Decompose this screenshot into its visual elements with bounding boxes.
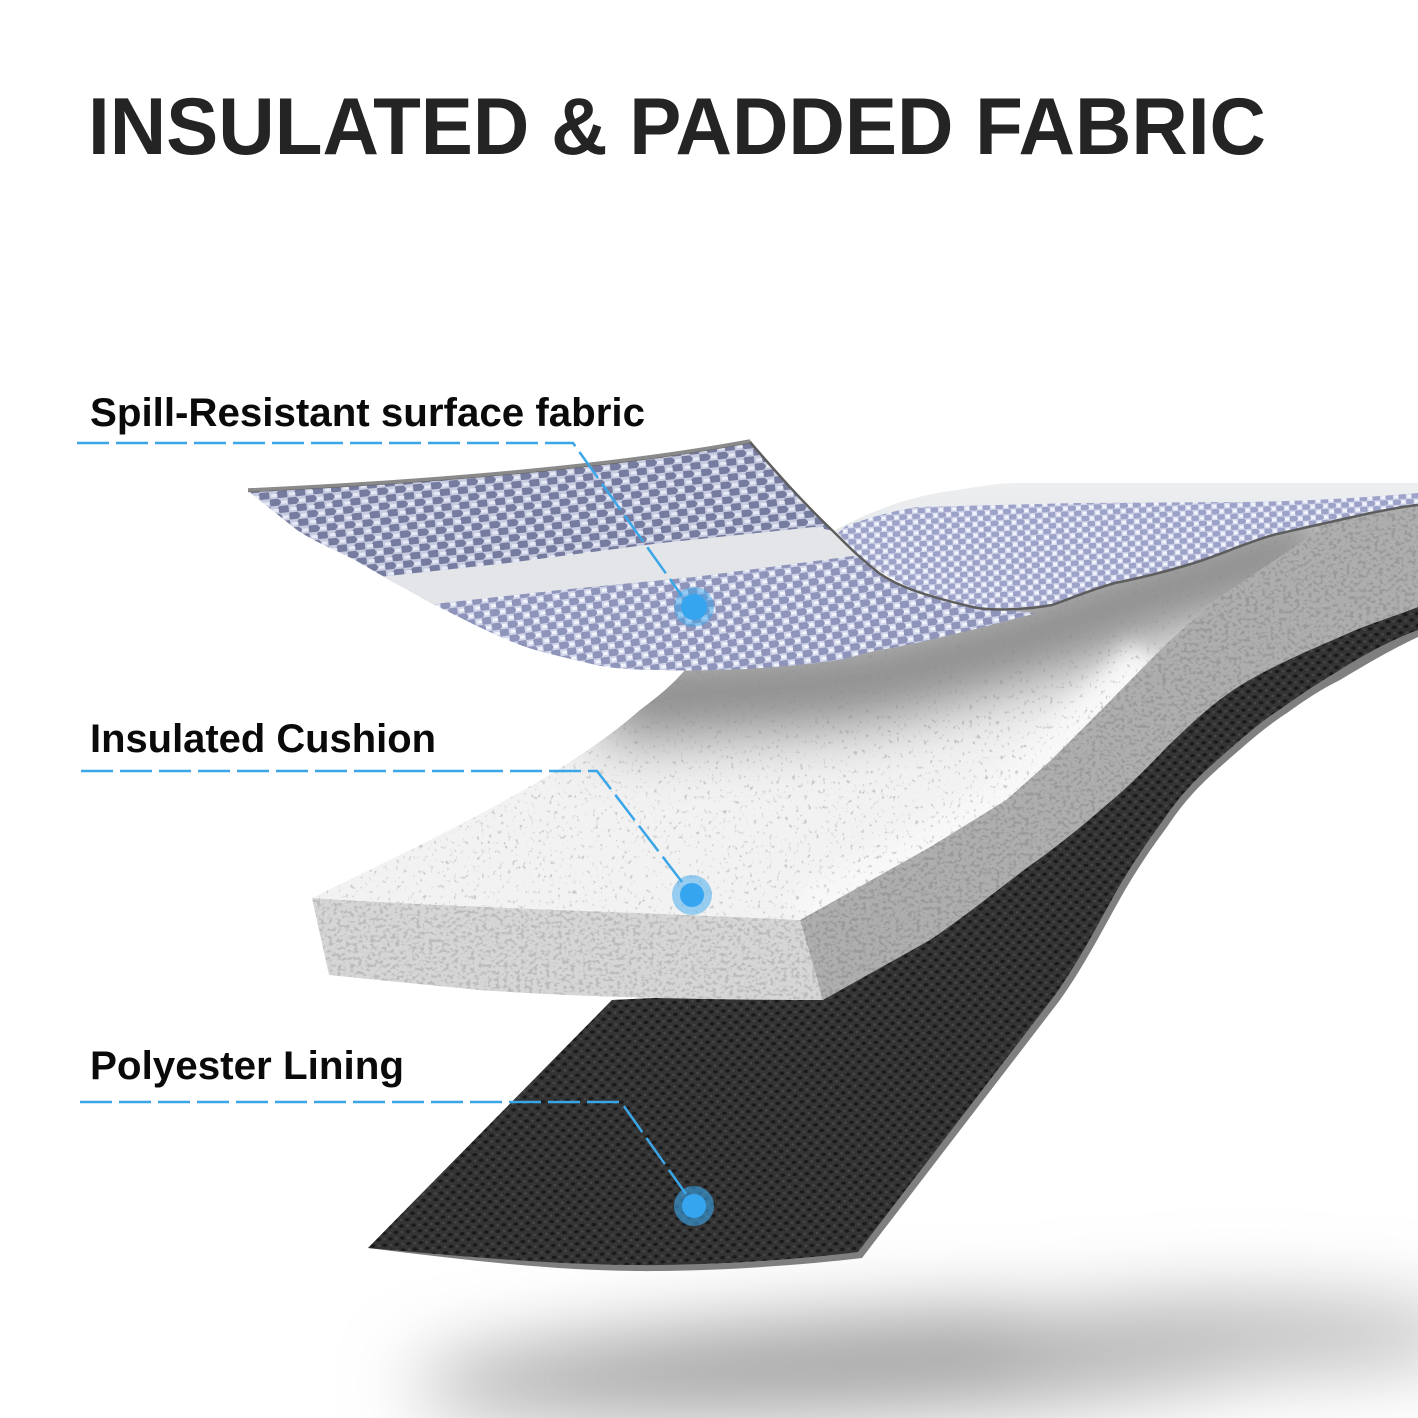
label: polyester lining [80, 1044, 714, 1226]
foam top surface [312, 526, 1320, 920]
fabric edge line [248, 442, 1418, 609]
title: INSULATED & PADDED FABRIC [88, 82, 1266, 172]
front fabric flap [250, 444, 1036, 670]
lining black weave surface [368, 590, 1418, 1265]
label text: Spill-Resistant surface fabric [90, 391, 645, 435]
lining grey edge [368, 590, 1418, 1271]
layer: insulated cushion foam [300, 490, 1418, 1000]
foam front cut face [312, 898, 823, 1000]
layer: spill-resistant surface fabric [240, 435, 1418, 680]
leader line [80, 1102, 686, 1194]
marker dot [672, 875, 712, 915]
back fabric fold [835, 483, 1418, 609]
flap dark weave band [240, 435, 1040, 675]
fabric top thickness [248, 441, 750, 490]
marker dot [674, 1186, 714, 1226]
foam side texture [800, 490, 1418, 1000]
label text: Insulated Cushion [90, 717, 436, 761]
label: insulated cushion [81, 717, 712, 915]
flap pale stripe [370, 527, 880, 606]
flap light lower band [434, 556, 1036, 670]
label: spill-resistant surface fabric [77, 391, 714, 627]
layer: polyester lining [368, 590, 1418, 1271]
leader line [77, 443, 682, 596]
foam right side face [800, 490, 1418, 1000]
back fabric weave band [838, 493, 1418, 609]
ground shadow [408, 1293, 1418, 1418]
marker dot [674, 587, 714, 627]
leader line [81, 771, 682, 882]
label text: Polyester Lining [90, 1044, 404, 1088]
foam front texture [312, 898, 823, 1000]
